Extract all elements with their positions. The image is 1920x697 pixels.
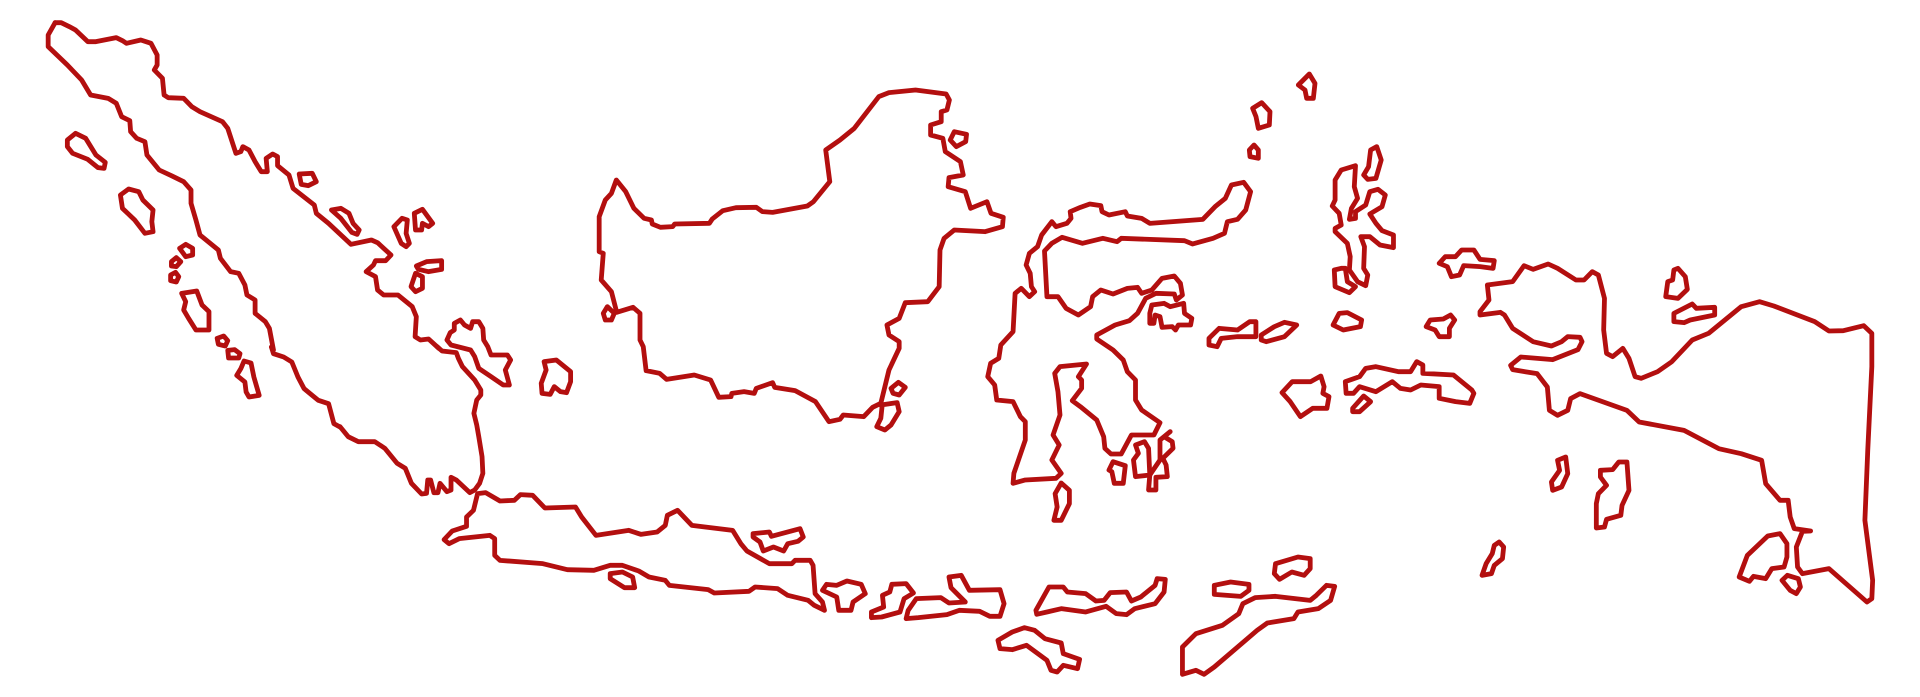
island: Sumatra (48, 23, 483, 494)
islands: west of Sumatra (67, 133, 259, 397)
islands: Sumba, Flores, Timor (998, 483, 1335, 674)
islands: far north (1249, 74, 1315, 158)
islands: Bali, Lombok, Sumbawa (822, 575, 1004, 619)
island: Kalimantan (599, 90, 1003, 430)
islands: Maluku (1282, 147, 1494, 417)
islands: Riau and Bintan (299, 173, 442, 292)
islands: Bangka and Belitung (447, 320, 571, 394)
island: Sulawesi (988, 182, 1251, 483)
islands: around Sulawesi (1109, 303, 1297, 490)
islands: Aru, Tanimbar, Kolepom (1482, 457, 1800, 594)
island: Java (444, 493, 824, 610)
island: Papua (1480, 264, 1873, 602)
